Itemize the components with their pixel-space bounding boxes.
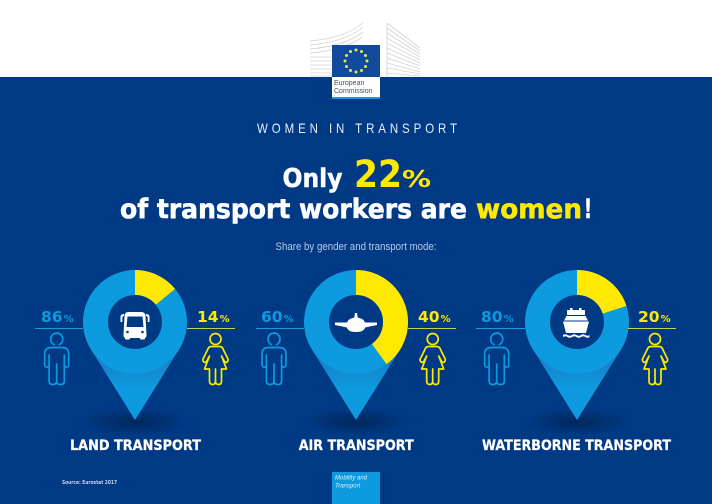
men percentage: 86 [41, 308, 63, 326]
icon: man [45, 333, 69, 384]
icon: bus [120, 312, 150, 340]
women percentage: 20 [638, 308, 660, 326]
panel: waterborne transport [476, 270, 676, 454]
women percentage: % [661, 314, 671, 325]
icon: plane [335, 313, 377, 332]
donut hole [329, 295, 383, 349]
subtitle: Share by gender and transport mode: [276, 241, 436, 253]
tag text: Mobility and [335, 476, 368, 482]
percent sign: % [402, 167, 431, 193]
exclamation mark: ! [584, 194, 592, 225]
women share [356, 270, 408, 364]
icon: woman [420, 334, 445, 384]
men share [304, 270, 408, 374]
donut hole [550, 295, 604, 349]
headline [120, 153, 592, 225]
men percentage: % [284, 314, 294, 325]
men percentage: 60 [261, 308, 283, 326]
men share [83, 270, 187, 374]
men line [35, 328, 83, 329]
tag box [332, 472, 380, 504]
women share [135, 270, 175, 305]
logo flag [332, 45, 380, 77]
logo: European Commission [310, 23, 420, 99]
men percentage: 80 [481, 308, 503, 326]
panel: land transport [35, 270, 235, 454]
panel: air transport [256, 270, 456, 454]
mode label: LAND TRANSPORT [70, 438, 201, 454]
men line [476, 328, 525, 329]
logo wordmark: European [334, 80, 364, 87]
icon: man [262, 333, 286, 384]
icon: ship [563, 308, 590, 338]
icon: man [485, 333, 509, 384]
flag stars [344, 48, 368, 74]
women percentage: % [220, 314, 230, 325]
word women: women [476, 194, 582, 225]
women line [408, 328, 456, 329]
women percentage: 14 [197, 308, 219, 326]
building illustration [310, 23, 420, 77]
tag text: Transport [335, 484, 361, 490]
men line [256, 328, 304, 329]
men share [525, 270, 629, 374]
figure 22: 22 [354, 153, 402, 196]
pin shadow [302, 408, 410, 436]
pin shadow [81, 408, 189, 436]
mode label: AIR TRANSPORT [299, 438, 414, 454]
pin cone [91, 325, 179, 420]
women percentage: % [441, 314, 451, 325]
pin cone [312, 325, 400, 420]
headline line 1: Only [282, 164, 343, 194]
header band [0, 0, 712, 77]
donut chart [525, 270, 629, 374]
headline line 2: of transport workers are [120, 194, 467, 225]
heading: WOMEN IN TRANSPORT [257, 120, 457, 136]
women share [577, 270, 626, 314]
women line [187, 328, 235, 329]
men percentage: % [64, 314, 74, 325]
women line [628, 328, 676, 329]
icon: woman [642, 334, 668, 384]
source note: Source: Eurostat 2017 [62, 480, 117, 486]
logo white base [332, 77, 380, 99]
footer tag: Mobility and Transport [332, 472, 380, 504]
donut chart [304, 270, 408, 374]
logo strip [332, 97, 380, 99]
pin cone [533, 325, 621, 420]
donut hole [108, 295, 162, 349]
logo wordmark: Commission [334, 88, 373, 95]
mode label: WATERBORNE TRANSPORT [482, 438, 671, 454]
pin shadow [523, 408, 631, 436]
donut chart [83, 270, 187, 374]
men percentage: % [504, 314, 514, 325]
icon: woman [203, 334, 228, 384]
women percentage: 40 [418, 308, 440, 326]
